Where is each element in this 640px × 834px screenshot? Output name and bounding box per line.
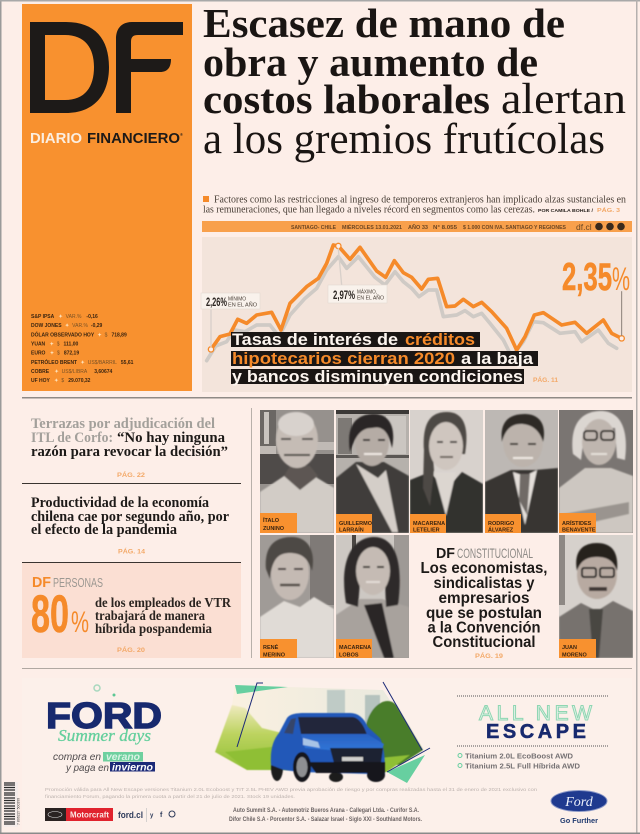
ad slogan: compra en <box>53 752 101 763</box>
market indicators: S&P IPSA ✦ VAR.% -0,16 <box>31 314 98 320</box>
story: Terrazas: PÁG. 22 <box>117 470 145 479</box>
ad logos: Motorcraft: y <box>150 813 154 819</box>
photo: Arístides Benavente: ARÍSTIDES <box>562 519 592 527</box>
headline summary: POR CAMILA BOHLE / <box>538 208 594 214</box>
photo: Macarena Letelier: MACARENA <box>413 521 445 527</box>
ad legal text: Promoción válida para All New Escape versiones Titanium 2.0L Ecoboost y TIT 2.5L PHEV AWD previa aprobación de riesgo y por compras realizadas hasta el 31 de enero de 2021 exclusivo con <box>45 787 538 792</box>
photo: Macarena Letelier: LETELIER <box>413 528 440 534</box>
callout: maximum <box>328 285 387 303</box>
chart headline: a la baja <box>461 350 534 368</box>
panel: interest-rate chart: % <box>612 261 630 297</box>
chart headline: y bancos disminuyen condiciones <box>232 368 523 386</box>
photo: Arístides Benavente: BENAVENTE <box>562 528 596 534</box>
chart headline: Tasas de interés de <box>232 331 398 349</box>
ad legal text: financiamiento Forum, pagando la primera cuota a partir del 21 de julio de 2021. Stock 19 unidades. <box>45 794 295 799</box>
ad image: car and landscape <box>215 682 430 783</box>
photo: René Merino: MERINO <box>263 652 286 658</box>
big value: 2,35 <box>562 256 612 299</box>
story: DF Constitucional: DF <box>436 545 455 562</box>
main headline: Escasez de mano de <box>203 0 565 46</box>
panel: DF Personas: DF <box>32 574 51 591</box>
panel: DF Personas: % <box>71 606 89 639</box>
story: DF Constitucional <box>420 545 548 660</box>
market indicators: DÓLAR OBSERVADO HOY ✦ $ 718,89 <box>31 330 127 338</box>
callout: maximum: 2,97% <box>333 288 355 302</box>
date bar <box>202 221 632 232</box>
photo: Rodrigo Álvarez: ÁLVAREZ <box>488 526 514 534</box>
photo: Juan Moreno: MORENO <box>562 652 587 658</box>
ad dealers: Auto Summit S.A. - Automotriz Bueros Arana - Callegari Ltda. - Curifor S.A. <box>233 807 419 814</box>
story: DF Constitucional: empresarios <box>438 590 530 607</box>
ad logo: Ford oval <box>551 790 607 825</box>
social icons <box>595 223 625 230</box>
market indicators <box>31 314 134 384</box>
logo wordmark: FINANCIERO <box>87 131 180 147</box>
ad legal text <box>45 787 538 799</box>
photo: Juan Moreno <box>559 535 633 658</box>
photo: Arístides Benavente <box>559 410 633 534</box>
advertisement: Ford <box>22 678 632 830</box>
chart headline: créditos <box>405 331 475 349</box>
car <box>271 713 385 782</box>
date bar: AÑO 33 <box>408 224 428 231</box>
main headline: obra y aumento de <box>203 39 538 85</box>
ad model list: ALL NEW <box>479 702 592 725</box>
ad model list <box>457 696 608 770</box>
story: DF Constitucional: que se postulan <box>426 605 542 622</box>
panel: DF Personas: híbrida pospandemia <box>95 621 212 636</box>
ad model list: ESCAPE <box>486 721 586 743</box>
market indicators: UF HOY ✦ $ 29.070,32 <box>31 378 91 384</box>
story: Productividad: el efecto de la pandemia <box>31 522 178 538</box>
market indicators: YUAN ✦ $ 111,00 <box>31 342 79 348</box>
masthead panel <box>22 4 192 391</box>
callout: minimum: MÍNIMO <box>228 296 246 302</box>
photo: René Merino: RENÉ <box>263 643 279 651</box>
photo: Guillermo Larraín <box>336 410 409 534</box>
date bar: SANTIAGO- CHILE <box>291 225 336 231</box>
ad dealers <box>229 807 422 823</box>
story: Terrazas: “No hay ninguna <box>117 430 226 446</box>
story: Terrazas: Terrazas por adjudicación del <box>31 416 215 432</box>
story: Productividad: PÁG. 14 <box>118 546 145 556</box>
ad logos: Motorcraft <box>45 808 175 822</box>
panel: DF Personas <box>22 563 241 658</box>
story: DF Constitucional: a la Convención <box>428 620 540 636</box>
date bar: N° 8.055 <box>433 225 457 231</box>
headline summary: PÁG. 3 <box>597 207 620 214</box>
ad dealers: Difor Chile S.A - Porcentor S.A. - Salazar Israel - Siglo XXI - Southland Motors. <box>229 816 422 823</box>
market indicators: EURO ✦ $ 872,19 <box>31 350 79 356</box>
market indicators: COBRE ✦ US$/LIBRA 3,60674 <box>31 369 113 375</box>
callout: minimum: 2,26% <box>206 295 227 309</box>
story: DF Constitucional: Constitucional <box>432 634 536 651</box>
story: Terrazas: razón para revocar la decisión” <box>31 444 228 460</box>
ad slogan <box>53 752 155 774</box>
panel: DF Personas: trabajará de manera <box>95 608 205 623</box>
ad logo: Ford Summer days: Summer days <box>58 726 151 745</box>
logo wordmark: ® <box>180 132 183 137</box>
story: Productividad: Productividad de la economía <box>31 495 210 511</box>
ad logos: Motorcraft: ford.cl <box>118 810 143 820</box>
panel: interest-rate chart: PÁG. 11 <box>533 375 558 384</box>
callout: minimum: EN EL AÑO <box>228 302 257 308</box>
story: DF Constitucional: CONSTITUCIONAL <box>457 545 533 561</box>
market indicators: DOW JONES ✦ VAR.% -0,29 <box>31 323 103 329</box>
ad model list: Titanium 2.0L EcoBoost AWD <box>465 752 574 760</box>
ad logo: Ford Summer days <box>46 685 162 745</box>
date bar: df.cl <box>576 222 592 232</box>
photo: Rodrigo Álvarez: RODRIGO <box>488 521 515 527</box>
headline summary <box>203 194 626 216</box>
callout: minimum <box>201 293 260 309</box>
logo wordmark: DIARIO <box>30 131 82 147</box>
date bar: MIÉRCOLES 13.01.2021 <box>342 223 402 231</box>
market indicators: PETRÓLEO BRENT ✦ US$/BARRIL 55,61 <box>31 358 134 366</box>
photo: Macarena Lobos: LOBOS <box>339 652 359 658</box>
panel: DF Personas: PÁG. 20 <box>117 645 145 654</box>
barcode: 7 806227 500399 <box>16 798 20 825</box>
photo: Ítalo Zunino: ZUNINO <box>263 526 285 532</box>
photo: Ítalo Zunino: ÍTALO <box>263 516 280 524</box>
story: DF Constitucional: sindicalistas y <box>434 575 535 592</box>
main headline <box>203 0 626 163</box>
callout: maximum: EN EL AÑO <box>357 294 384 302</box>
panel: DF Personas: 80 <box>31 585 69 644</box>
logo wordmark <box>30 131 183 147</box>
main headline: costos laborales <box>203 76 490 122</box>
story: Productividad <box>31 495 230 556</box>
headline summary: las remuneraciones, que han llegado a niveles récord en segmentos como las cerezas. <box>203 204 535 216</box>
ad model list: Titanium 2.5L Full Híbrida AWD <box>465 762 581 770</box>
ad logo: Ford Summer days: FORD <box>46 695 162 736</box>
ad slogan: invierno <box>112 762 153 774</box>
story: Productividad: chilena cae por segundo año, por <box>31 509 230 525</box>
ad slogan: verano <box>106 752 140 763</box>
story: Terrazas: ITL de Corfo: <box>31 430 113 446</box>
callout: maximum: MÁXIMO, <box>357 288 377 296</box>
ad logo: Ford oval: Ford <box>564 795 594 810</box>
photo: Macarena Letelier <box>410 410 483 534</box>
ad logos: Motorcraft: Motorcraft <box>70 810 109 820</box>
story: Terrazas <box>31 416 228 479</box>
panel: DF Personas: de los empleados de VTR <box>95 595 231 610</box>
photo: Macarena Lobos <box>336 535 409 658</box>
date bar: $ 1.000 CON IVA. SANTIAGO Y REGIONES <box>463 225 566 231</box>
photo: Rodrigo Álvarez <box>485 410 558 534</box>
photo: René Merino <box>260 535 334 658</box>
main headline: a los gremios frutícolas <box>203 116 605 163</box>
photo: Macarena Lobos: MACARENA <box>339 645 371 651</box>
main headline: alertan <box>501 76 626 123</box>
chart headline <box>231 331 538 386</box>
line chart <box>207 243 624 361</box>
barcode <box>4 782 20 827</box>
headline summary: Factores como las restricciones al ingreso de temporeros extranjeros han implicado alzas sustanciales en <box>214 194 626 206</box>
photo: Ítalo Zunino <box>260 410 334 533</box>
ad slogan: y paga en <box>65 763 109 774</box>
panel: interest-rate chart <box>201 237 632 392</box>
panel: DF Personas: PERSONAS <box>53 575 103 590</box>
ad logos: Motorcraft: f <box>160 812 163 819</box>
chart headline: hipotecarios cierran 2020 <box>232 350 455 368</box>
photo: Guillermo Larraín: GUILLERMO <box>339 521 373 527</box>
story: DF Constitucional: PÁG. 19 <box>475 651 503 660</box>
ad logo: Ford oval: Go Further <box>560 816 598 825</box>
logo: DF <box>30 22 183 113</box>
photo: Juan Moreno: JUAN <box>562 645 577 651</box>
story: DF Constitucional: Los economistas, <box>420 560 548 577</box>
photo: Guillermo Larraín: LARRAÍN <box>339 526 364 534</box>
